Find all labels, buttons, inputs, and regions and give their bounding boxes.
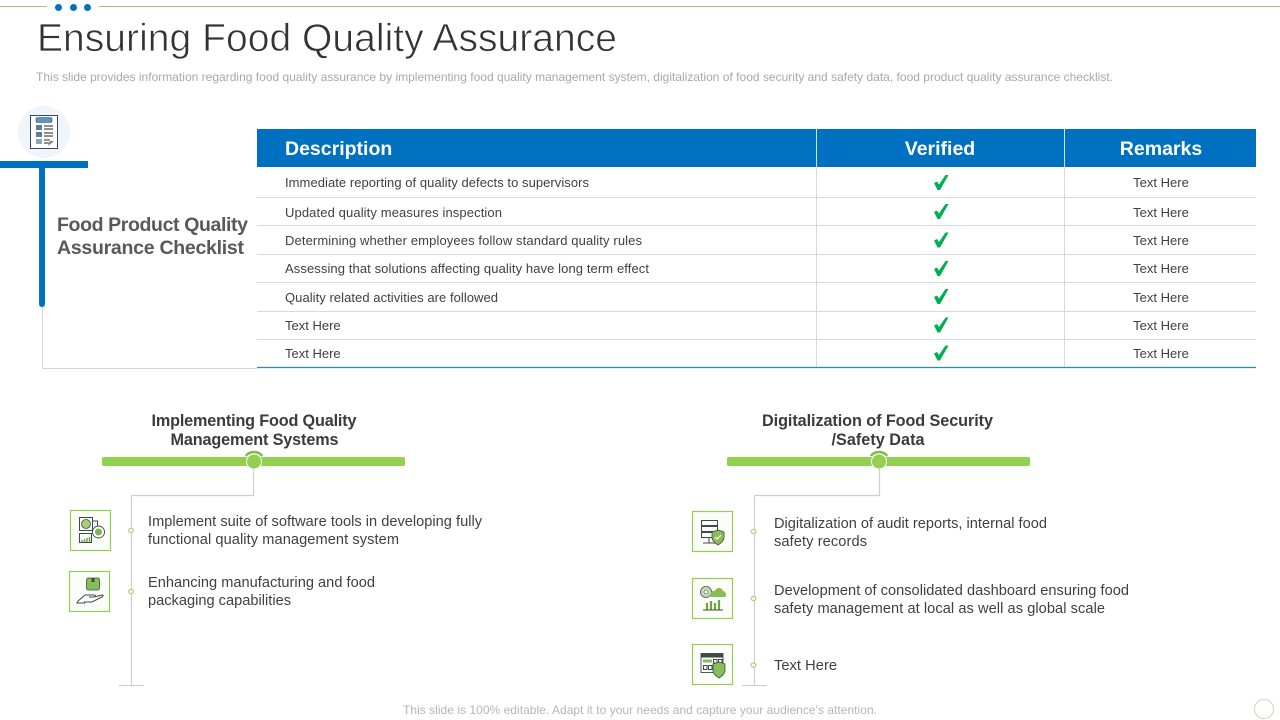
row 1: Text Here <box>1133 175 1189 190</box>
row 2 <box>285 204 1189 220</box>
icon: audit data shield <box>692 512 732 552</box>
icon: dashboard cloud <box>692 578 732 618</box>
text: audit reports: Digitalization of audit reports, internal food <box>774 516 1047 532</box>
table header: Verified <box>905 138 975 160</box>
heading <box>762 412 993 449</box>
panel: digitalization of food security and safety data <box>692 412 1129 686</box>
row 4 <box>285 261 1189 276</box>
row 1 <box>285 175 1189 190</box>
row 7: Text Here <box>1133 346 1189 361</box>
heading: Management Systems <box>170 431 338 449</box>
header decoration <box>0 4 1280 11</box>
row 5 <box>285 289 1189 305</box>
checklist heading <box>57 214 248 259</box>
title: Ensuring Food Quality Assurance <box>37 17 617 60</box>
row 7: Text Here <box>285 346 341 361</box>
row 2: Text Here <box>1133 205 1189 220</box>
timeline connector <box>119 468 254 686</box>
text: packaging: Enhancing manufacturing and food <box>148 575 375 591</box>
text: audit reports <box>774 516 1047 550</box>
heading <box>152 412 356 449</box>
row 6: Text Here <box>285 318 341 333</box>
heading: Digitalization of Food Security <box>762 412 993 430</box>
row 7 <box>285 346 1189 361</box>
row 3 <box>285 232 1189 248</box>
panel: implementing food quality management systems <box>70 412 483 686</box>
heading: Implementing Food Quality <box>152 412 356 430</box>
row 4: Assessing that solutions affecting quality have long term effect <box>285 261 649 276</box>
green slider bar <box>727 452 1030 469</box>
text: dashboard: safety management at local as well as global scale <box>774 601 1105 617</box>
footer note: This slide is 100% editable. Adapt it to your needs and capture your audience's attention. <box>403 703 877 717</box>
timeline connector <box>742 468 880 686</box>
text: text here: Text Here <box>774 658 837 674</box>
row 6 <box>285 318 1189 333</box>
table header <box>257 129 1256 167</box>
checklist heading: Assurance Checklist <box>57 237 244 259</box>
icon: packaging <box>70 572 110 612</box>
text: software tools <box>148 514 483 548</box>
icon: software tools <box>70 510 110 550</box>
checklist table <box>257 129 1256 368</box>
heading: /Safety Data <box>832 431 925 449</box>
row 5: Quality related activities are followed <box>285 290 498 305</box>
icon: web security <box>692 644 732 684</box>
text: packaging: packaging capabilities <box>148 593 291 609</box>
row 5: Text Here <box>1133 290 1189 305</box>
table header: Remarks <box>1120 138 1202 160</box>
row 4: Text Here <box>1133 261 1189 276</box>
checklist side bracket <box>0 161 257 368</box>
text: dashboard: Development of consolidated dashboard ensuring food <box>774 583 1129 599</box>
row 1: Immediate reporting of quality defects to supervisors <box>285 175 590 190</box>
text: software tools: Implement suite of software tools in developing fully <box>148 514 483 530</box>
row 3: Determining whether employees follow standard quality rules <box>285 233 642 248</box>
row 2: Updated quality measures inspection <box>285 205 502 220</box>
text: software tools: functional quality management system <box>148 532 399 548</box>
row 3: Text Here <box>1133 233 1189 248</box>
page marker circle <box>1254 700 1274 718</box>
row 6: Text Here <box>1133 318 1189 333</box>
icon: clipboard checklist <box>18 106 70 158</box>
text: packaging <box>148 575 375 609</box>
table header: Description <box>285 138 392 160</box>
checklist heading: Food Product Quality <box>57 214 248 236</box>
text: dashboard <box>774 583 1129 617</box>
subtitle: This slide provides information regarding food quality assurance by implementing food quality management system, digitalization of food security and safety data, food product quality assurance checklist. <box>36 70 1113 84</box>
green slider bar <box>102 452 405 469</box>
text: audit reports: safety records <box>774 534 867 550</box>
